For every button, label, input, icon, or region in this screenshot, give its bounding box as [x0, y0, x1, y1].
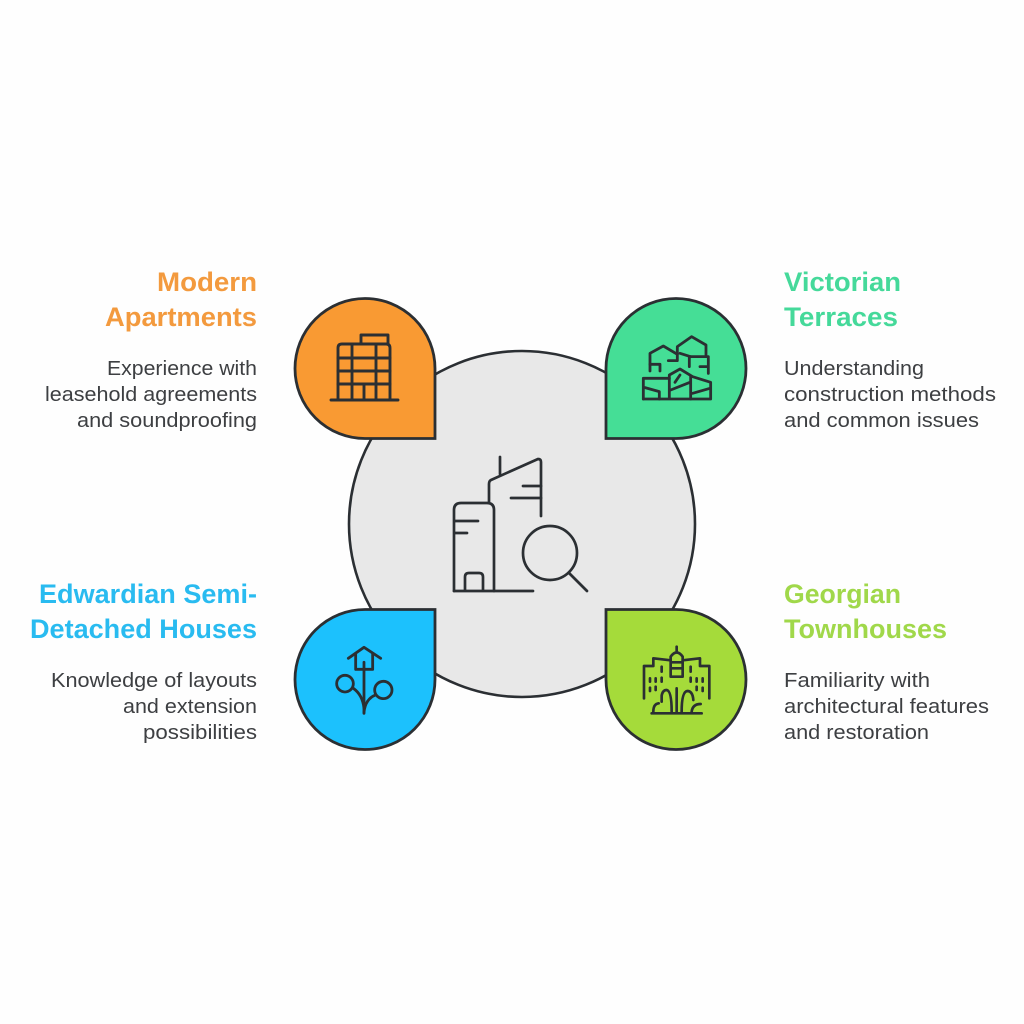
label: edwardian semi-detached houses	[30, 579, 257, 744]
description	[45, 358, 257, 432]
label: georgian townhouses	[784, 579, 989, 744]
teardrop: edwardian semi-detached houses	[295, 610, 435, 750]
heading: Victorian	[784, 267, 901, 297]
icon: georgian building	[644, 647, 709, 713]
heading: Edwardian Semi-	[39, 579, 257, 609]
teardrop: georgian townhouses	[606, 610, 746, 750]
teardrop: modern apartments	[295, 298, 435, 438]
icon: apartment block	[331, 335, 398, 400]
description: and common issues	[784, 410, 979, 432]
description: construction methods	[784, 384, 996, 406]
description: Experience with	[107, 358, 257, 380]
icon: house extension tree	[337, 647, 392, 713]
description: architectural features	[784, 696, 989, 718]
heading	[30, 579, 257, 644]
heading: Apartments	[105, 302, 257, 332]
description: and extension	[123, 696, 257, 718]
heading: Detached Houses	[30, 614, 257, 644]
icon: buildings with magnifying glass	[454, 457, 587, 591]
heading: Terraces	[784, 302, 898, 332]
central circle	[349, 351, 695, 697]
description: and soundproofing	[77, 410, 257, 432]
heading: Townhouses	[784, 614, 947, 644]
heading	[784, 267, 901, 332]
description: leasehold agreements	[45, 384, 257, 406]
description: Understanding	[784, 358, 924, 380]
label: victorian terraces	[784, 267, 996, 432]
icon: terrace houses	[643, 337, 711, 399]
description: Familiarity with	[784, 670, 930, 692]
heading	[784, 579, 947, 644]
description	[784, 358, 996, 432]
description	[784, 670, 989, 744]
teardrop: victorian terraces	[606, 298, 746, 438]
description: and restoration	[784, 722, 929, 744]
heading: Georgian	[784, 579, 901, 609]
label: modern apartments	[45, 267, 257, 432]
heading	[105, 267, 257, 332]
description: possibilities	[143, 722, 257, 744]
heading: Modern	[157, 267, 257, 297]
description: Knowledge of layouts	[51, 670, 257, 692]
description	[51, 670, 257, 744]
